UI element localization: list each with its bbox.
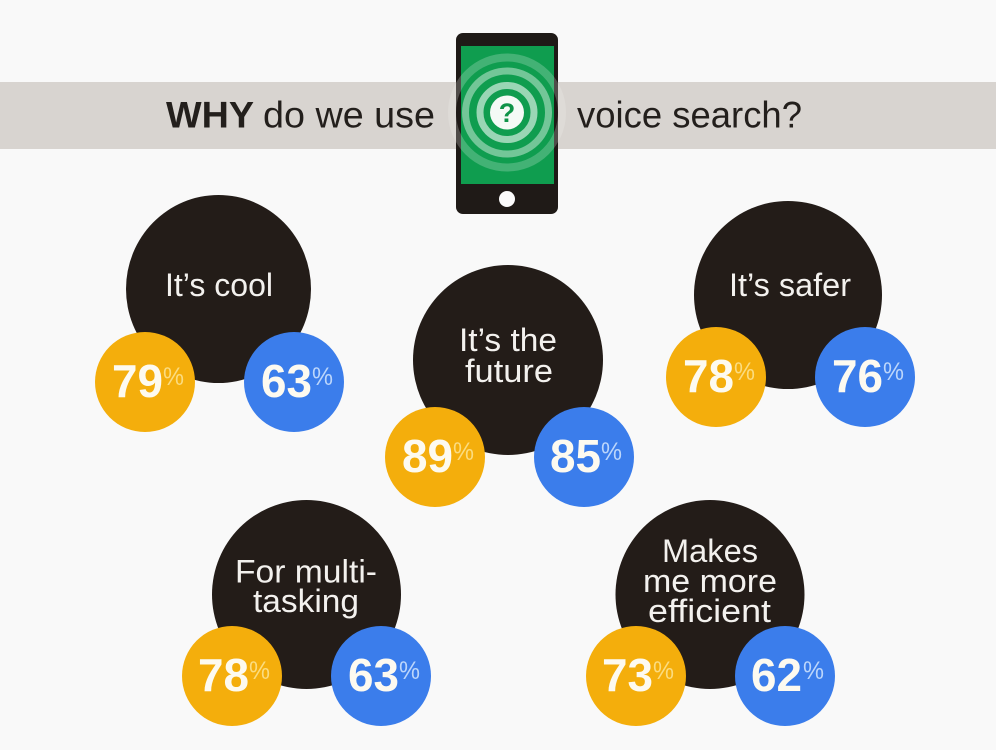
panel: Makes me more efficient: %: [653, 657, 674, 685]
panel: It's cool: It’s cool: [165, 267, 273, 303]
panel: Makes me more efficient: me more: [643, 563, 777, 599]
panel: It's the future: [385, 265, 634, 507]
panel: It's safer: 78: [683, 350, 734, 402]
panel: For multi-tasking: %: [399, 657, 420, 685]
panel: It's safer: %: [734, 358, 755, 386]
panel: Makes me more efficient: %: [803, 657, 824, 685]
panel: For multi-tasking: For multi-: [235, 554, 377, 590]
icon: phone with sound rings: ?: [499, 98, 515, 128]
title text left: WHY: [166, 94, 254, 136]
panel: For multi-tasking: %: [249, 657, 270, 685]
panel: It's cool: 63: [261, 355, 312, 407]
title band: [0, 82, 996, 149]
panel: It's the future: It’s the: [459, 322, 557, 358]
panel: For multi-tasking: 78: [198, 649, 249, 701]
panel: It's the future: %: [601, 438, 622, 466]
panel: Makes me more efficient: 73: [602, 649, 653, 701]
panel: It's safer: It’s safer: [729, 267, 851, 303]
panel: It's cool: %: [163, 363, 184, 391]
panel: It's cool: 79: [112, 355, 163, 407]
icon: phone with sound rings: [456, 33, 558, 214]
panel: It's the future: 89: [402, 430, 453, 482]
panel: For multi-tasking: tasking: [253, 583, 359, 619]
panel: For multi-tasking: [182, 500, 431, 726]
title text right: voice search?: [577, 94, 802, 136]
panel: It's cool: %: [312, 363, 333, 391]
title text left: do we use: [263, 94, 435, 136]
panel: It's the future: future: [465, 353, 553, 389]
panel: It's the future: %: [453, 438, 474, 466]
panel: For multi-tasking: 63: [348, 649, 399, 701]
panel: It's cool: [95, 195, 344, 432]
panel: Makes me more efficient: Makes: [662, 533, 758, 569]
panel: It's safer: %: [883, 358, 904, 386]
panel: Makes me more efficient: [586, 500, 835, 726]
panel: It's safer: [666, 201, 915, 427]
panel: Makes me more efficient: 62: [751, 649, 802, 701]
panel: It's the future: 85: [550, 430, 601, 482]
panel: It's safer: 76: [832, 350, 883, 402]
panel: Makes me more efficient: efficient: [648, 593, 771, 629]
